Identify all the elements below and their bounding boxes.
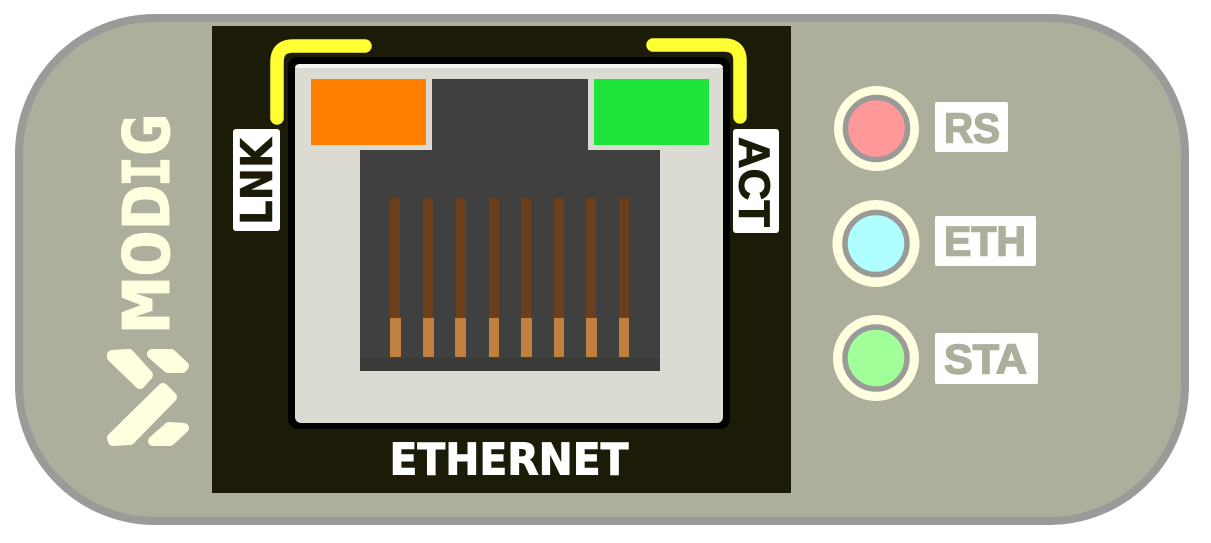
status LED: STA: STA (944, 336, 1027, 382)
jack shadow (288, 57, 730, 429)
jack opening (360, 79, 660, 371)
logo wordmark: D (111, 184, 185, 230)
logo wordmark (111, 114, 185, 332)
jack housing (295, 64, 723, 423)
status LED: ETH: ETH (944, 218, 1026, 264)
logo wordmark: M (111, 277, 185, 332)
logo wordmark: O (111, 230, 185, 277)
panel: ethernet board (212, 26, 791, 493)
LED window: green (594, 79, 709, 145)
status LED: RS: RS (944, 104, 1000, 152)
LED window: orange (311, 79, 426, 145)
contact pins (390, 198, 629, 357)
arrow: LNK indicator trace (277, 46, 365, 118)
status LED: ETH (832, 200, 1036, 287)
brand logo: Modig (111, 114, 185, 441)
jack opening lower band (360, 358, 660, 371)
status LED: RS (834, 86, 1008, 171)
arrow: ACT indicator trace (653, 45, 740, 117)
icon: RJ45 ethernet jack (288, 57, 730, 429)
label: LNK: LNK (232, 136, 283, 225)
heading: ETHERNET: ETHERNET (390, 434, 628, 486)
logo mark (112, 354, 184, 441)
label: ACT: ACT (730, 137, 778, 227)
logo wordmark: G (111, 114, 185, 157)
status LED: STA (833, 315, 1038, 401)
jack top highlight (295, 64, 723, 68)
logo wordmark: I (111, 156, 185, 187)
